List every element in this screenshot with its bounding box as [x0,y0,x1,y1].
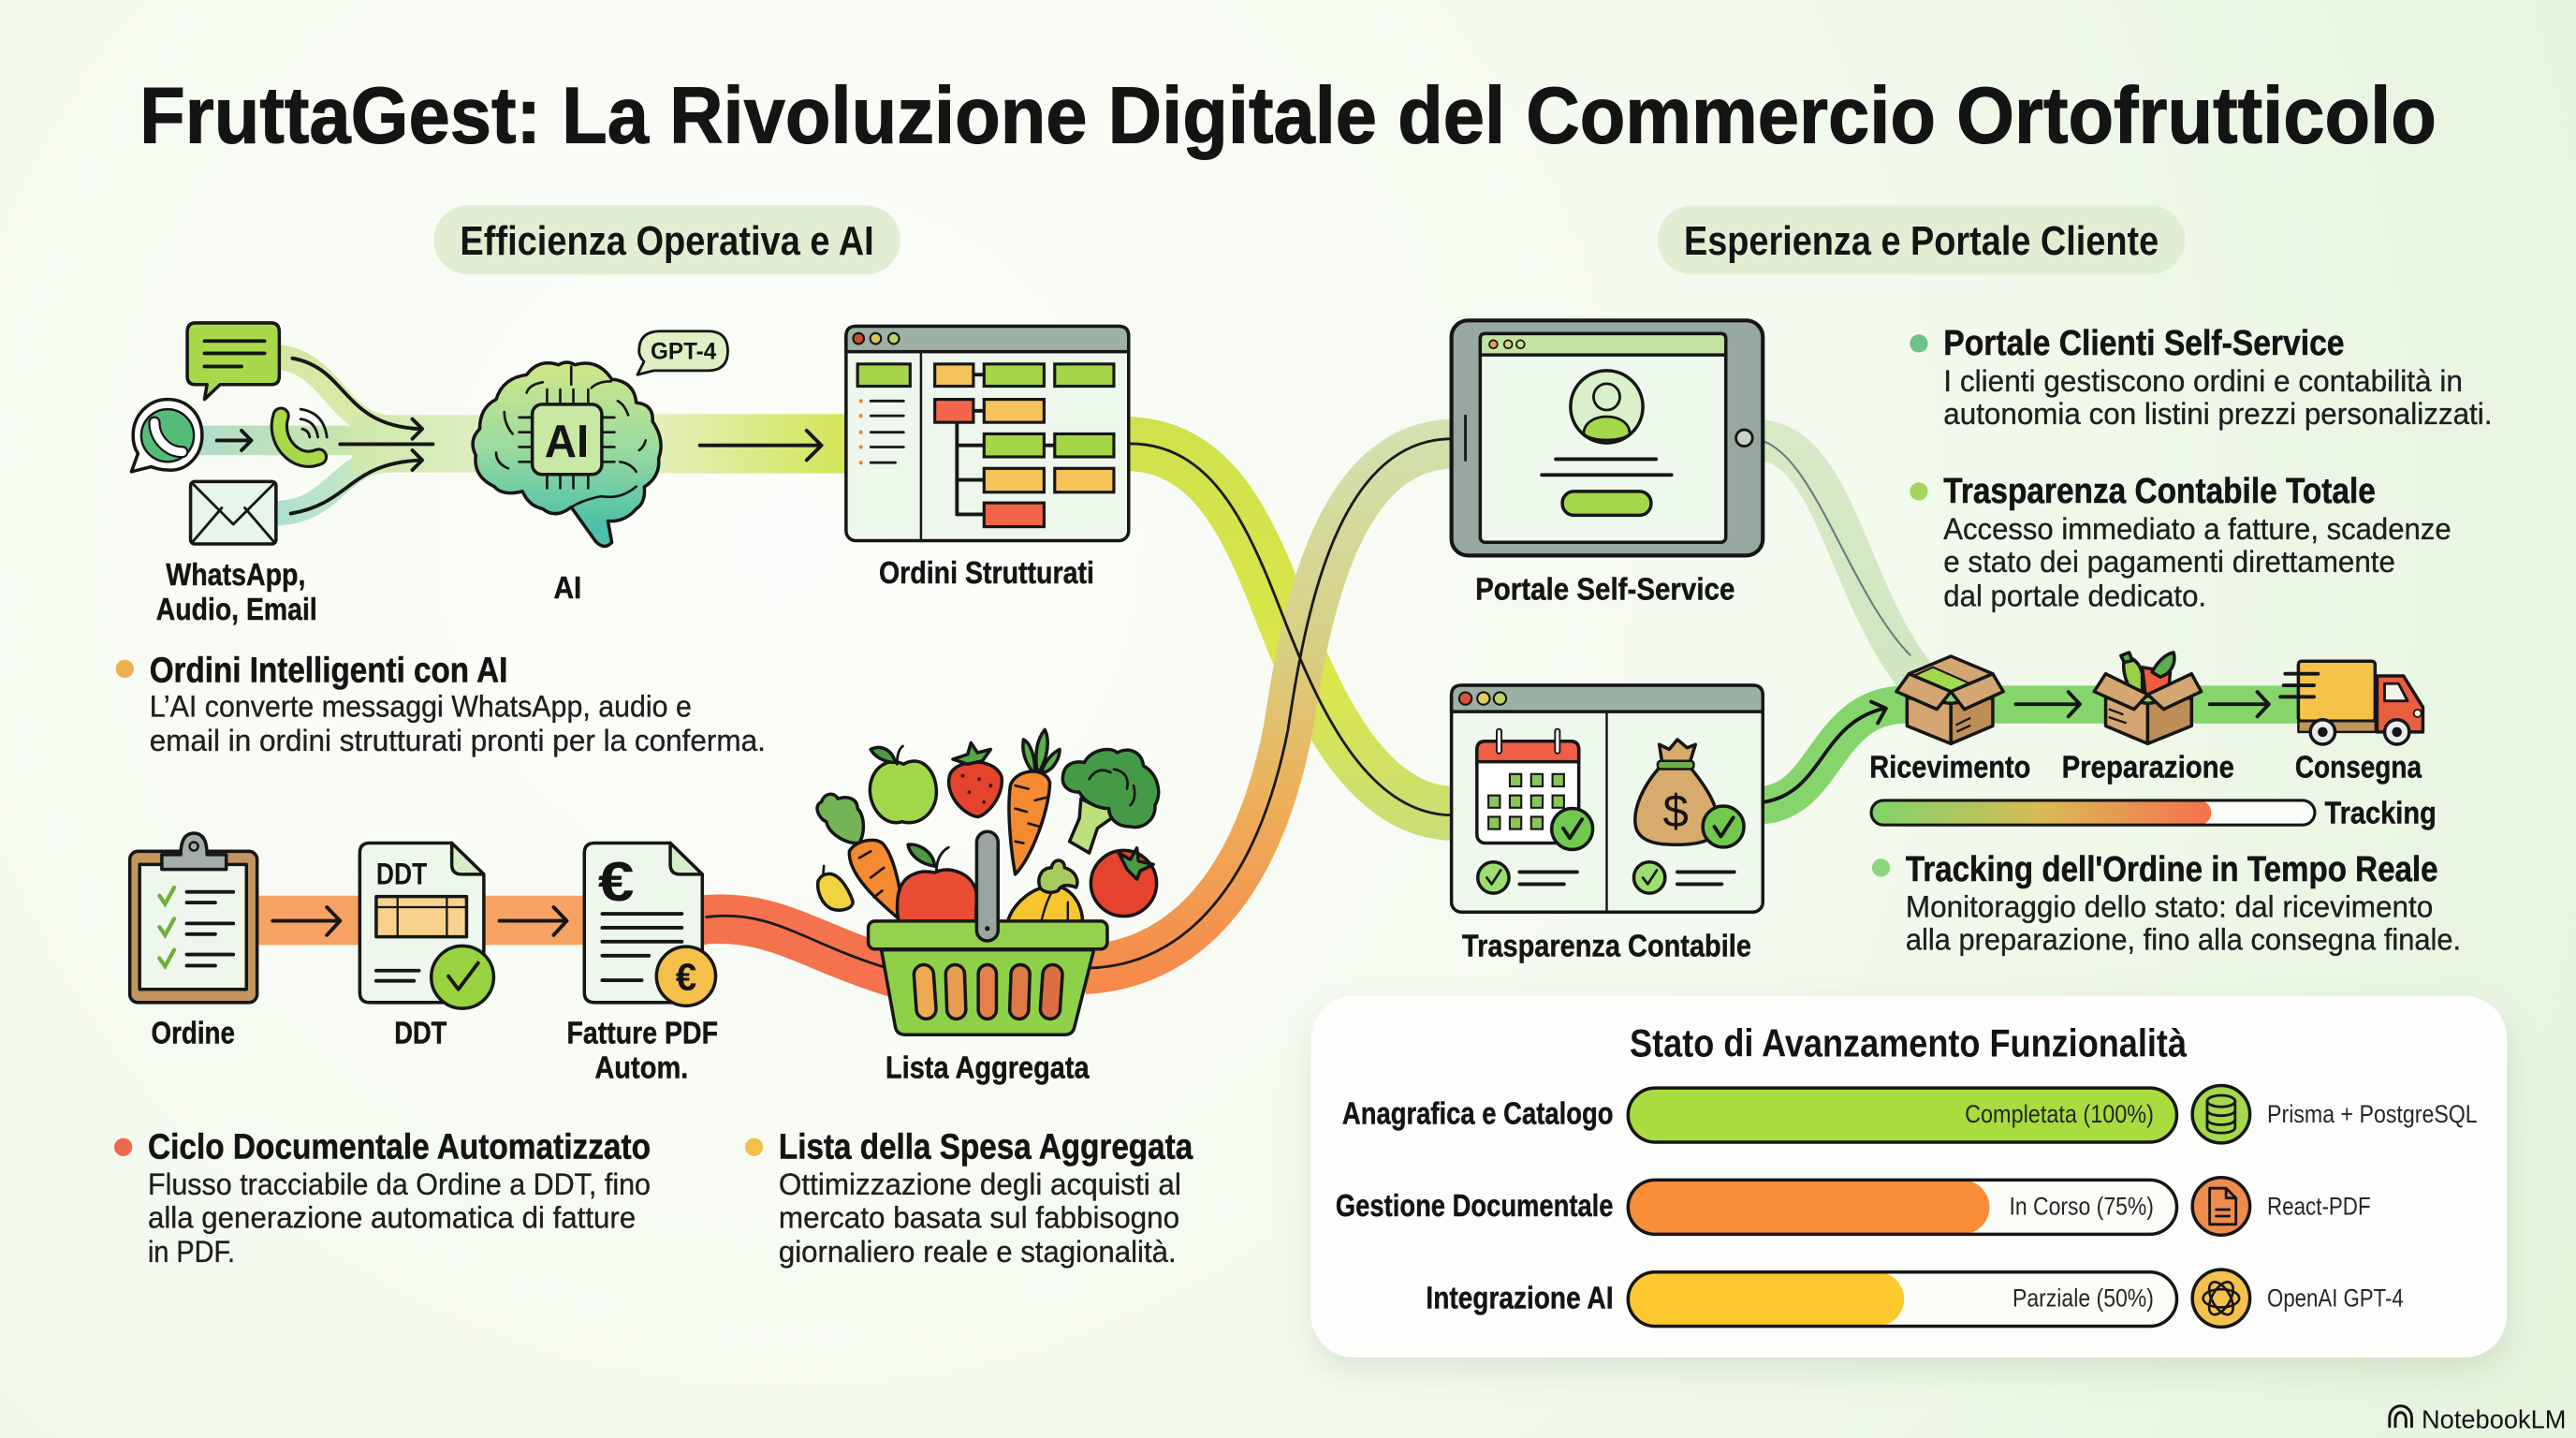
heading pill: Efficienza Operativa e AI: Efficienza Operativa e AI [460,218,874,264]
tracking progress bar: Tracking [2324,796,2437,830]
text block: Trasparenza Contabile Totale [1910,471,2452,613]
label: Ricevimento: Ricevimento [1869,750,2030,785]
text block: Portale Clienti Self-Service: I clienti gestiscono ordini e contabilità in [1943,364,2463,398]
icon: AI brain [473,362,661,546]
text block: Lista della Spesa Aggregata: Ottimizzazione degli acquisti al [779,1167,1181,1201]
row: Gestione Documentale: In Corso (75%) [2009,1191,2154,1220]
row: Gestione Documentale [1336,1178,2371,1235]
text block: Tracking dell'Ordine in Tempo Reale: alla preparazione, fino alla consegna finale. [1906,923,2461,957]
arrow: AI to orders [700,431,822,461]
label: Ordine: Ordine [151,1017,235,1051]
text block: Ciclo Documentale Automatizzato: in PDF. [148,1235,235,1269]
icon: WhatsApp [131,400,202,472]
NotebookLM watermark: NotebookLM [2422,1404,2566,1433]
text block: Ordini Intelligenti con AI: L’AI converte messaggi WhatsApp, audio e [150,689,692,723]
label: Fatture PDF Autom.: Autom. [594,1051,688,1086]
icon: invoice PDF: € [598,850,634,913]
label: Trasparenza Contabile: Trasparenza Contabile [1462,930,1751,964]
bananas [1007,860,1083,924]
arrow: received to preparation [2016,692,2080,716]
text block: Trasparenza Contabile Totale: Trasparenza Contabile Totale [1943,471,2376,510]
label: Portale Self-Service: Portale Self-Service [1475,573,1734,608]
tomato [1090,848,1157,917]
icon: GPT-4 bubble: GPT-4 [651,340,717,365]
row: Anagrafica e Catalogo: Anagrafica e Catalogo [1342,1097,1614,1132]
row: Anagrafica e Catalogo: Prisma + PostgreSQL [2267,1099,2478,1128]
tracking progress bar [1871,796,2437,830]
icon: AI brain: AI [545,417,589,467]
arrow: accounting to delivery [1764,702,1886,802]
icon: DDT document: DDT [376,857,427,890]
broccoli [1062,749,1159,853]
label: WhatsApp, Audio, Email: Audio, Email [156,593,317,627]
heading pill: Esperienza e Portale Cliente [1658,205,2185,274]
label: WhatsApp, Audio, Email [156,558,317,627]
text block: Trasparenza Contabile Totale: e stato dei pagamenti direttamente [1943,545,2395,579]
icon: DDT document [359,844,493,1008]
panel heading: Stato di Avanzamento Funzionalità [1630,1021,2188,1065]
icon: clipboard [130,833,257,1003]
label: Lista Aggregata: Lista Aggregata [886,1051,1090,1086]
text block: Ciclo Documentale Automatizzato [114,1127,651,1269]
green apple [870,746,936,823]
row: Integrazione AI: OpenAI GPT-4 [2267,1284,2404,1313]
text block: Tracking dell'Ordine in Tempo Reale [1872,849,2461,957]
arrow: DDT to invoice [500,907,567,935]
label: Fatture PDF Autom.: Fatture PDF [567,1017,718,1051]
icon: invoice PDF [584,844,716,1005]
text block: Ciclo Documentale Automatizzato: alla generazione automatica di fatture [148,1200,636,1234]
label: AI: AI [553,571,581,606]
icon: prepared box [2094,653,2202,743]
icon: fruit and vegetables [817,729,1159,924]
icon: GPT-4 bubble [637,331,728,374]
text block: Lista della Spesa Aggregata: giornaliero reale e stagionalità. [779,1235,1177,1269]
strawberry [949,742,1002,816]
title: FruttaGest: La Rivoluzione Digitale del Commercio Ortofrutticolo [139,72,2437,161]
row: Integrazione AI [1426,1269,2404,1328]
icon: basket [869,831,1107,1034]
icon: message bubble [187,323,279,400]
icon: phone [279,409,327,459]
panel: stato di avanzamento [1311,996,2507,1357]
text block: Portale Clienti Self-Service: Portale Clienti Self-Service [1943,323,2345,362]
text block: Portale Clienti Self-Service [1910,323,2492,431]
heading pill: Efficienza Operativa e AI [433,205,900,274]
text block: Trasparenza Contabile Totale: Accesso immediato a fatture, scadenze [1943,512,2452,546]
row: Integrazione AI: Integrazione AI [1426,1281,1614,1315]
icon: small arrow [217,431,252,450]
icon: received box [1896,656,2003,743]
icon: accounting window [1452,685,1763,912]
arrow: order to DDT [272,907,340,935]
text block: Lista della Spesa Aggregata: mercato basata sul fabbisogno [779,1200,1179,1234]
calendar [1477,731,1593,849]
icon: envelope [191,481,276,544]
text block: Lista della Spesa Aggregata [745,1127,1193,1269]
text block: Lista della Spesa Aggregata: Lista della Spesa Aggregata [779,1127,1193,1167]
label: Ordini Strutturati: Ordini Strutturati [879,556,1094,591]
left carrot [817,794,903,918]
icon: self-service portal tablet [1452,320,1763,555]
icon: structured orders window [846,326,1129,541]
row: Gestione Documentale: React-PDF [2267,1191,2371,1220]
row: Integrazione AI: Parziale (50%) [2012,1284,2154,1313]
money bag: $ [1663,786,1689,837]
text block: Ordini Intelligenti con AI [116,650,766,757]
text block: Ciclo Documentale Automatizzato: Ciclo Documentale Automatizzato [148,1127,651,1167]
label: Consegna: Consegna [2295,750,2422,785]
money bag [1635,740,1744,847]
heading pill: Esperienza e Portale Cliente: Esperienza e Portale Cliente [1684,218,2159,264]
text block: Tracking dell'Ordine in Tempo Reale: Tracking dell'Ordine in Tempo Reale [1906,849,2438,888]
label: DDT: DDT [394,1017,447,1051]
red apple [898,844,976,924]
label: WhatsApp, Audio, Email: WhatsApp, [166,558,305,593]
arrow: preparation to delivery [2210,692,2269,716]
icon: delivery truck [2280,661,2422,744]
lemon [818,866,853,910]
label: Fatture PDF Autom. [567,1017,718,1086]
flow ribbons [198,357,2308,973]
text block: Ordini Intelligenti con AI: Ordini Intelligenti con AI [150,650,507,690]
text block: Portale Clienti Self-Service: autonomia con listini prezzi personalizzati. [1943,397,2492,431]
row: Anagrafica e Catalogo: Completata (100%) [1965,1099,2154,1128]
text block: Trasparenza Contabile Totale: dal portale dedicato. [1943,580,2206,613]
text block: Ordini Intelligenti con AI: email in ordini strutturati pronti per la conferma. [150,724,766,757]
row: Gestione Documentale: Gestione Documentale [1336,1189,1614,1224]
text block: Ciclo Documentale Automatizzato: Flusso tracciabile da Ordine a DDT, fino [148,1167,651,1201]
label: Preparazione: Preparazione [2062,750,2234,785]
text block: Tracking dell'Ordine in Tempo Reale: Monitoraggio dello stato: dal ricevimento [1906,890,2433,924]
row: Anagrafica e Catalogo [1342,1085,2478,1143]
input arrows [291,359,432,514]
carrot [1009,729,1060,874]
icon: invoice PDF: € [676,956,696,999]
